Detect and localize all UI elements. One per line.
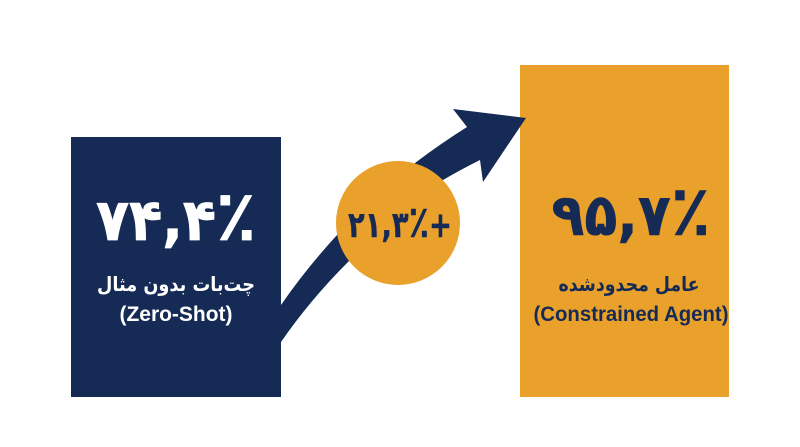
label: constrained agent Persian: عامل محدودشده: [558, 272, 700, 296]
panel: zero-shot chatbot: [71, 137, 281, 397]
label: Constrained Agent: (Constrained Agent): [534, 303, 728, 326]
label: Zero-Shot: (Zero-Shot): [120, 303, 232, 326]
value: 74.4%: ۷۴,۴٪: [96, 175, 256, 257]
label: chatbot without example: چت‌بات بدون مثال: [97, 272, 255, 297]
badge: +21.3% improvement: [336, 161, 460, 285]
value: +21.3%: ۲۱,۳٪+: [348, 197, 452, 248]
value: 95.7%: ۹۵,۷٪: [552, 170, 710, 252]
panel: constrained agent: [520, 65, 729, 397]
arrow: growth: [281, 109, 526, 342]
